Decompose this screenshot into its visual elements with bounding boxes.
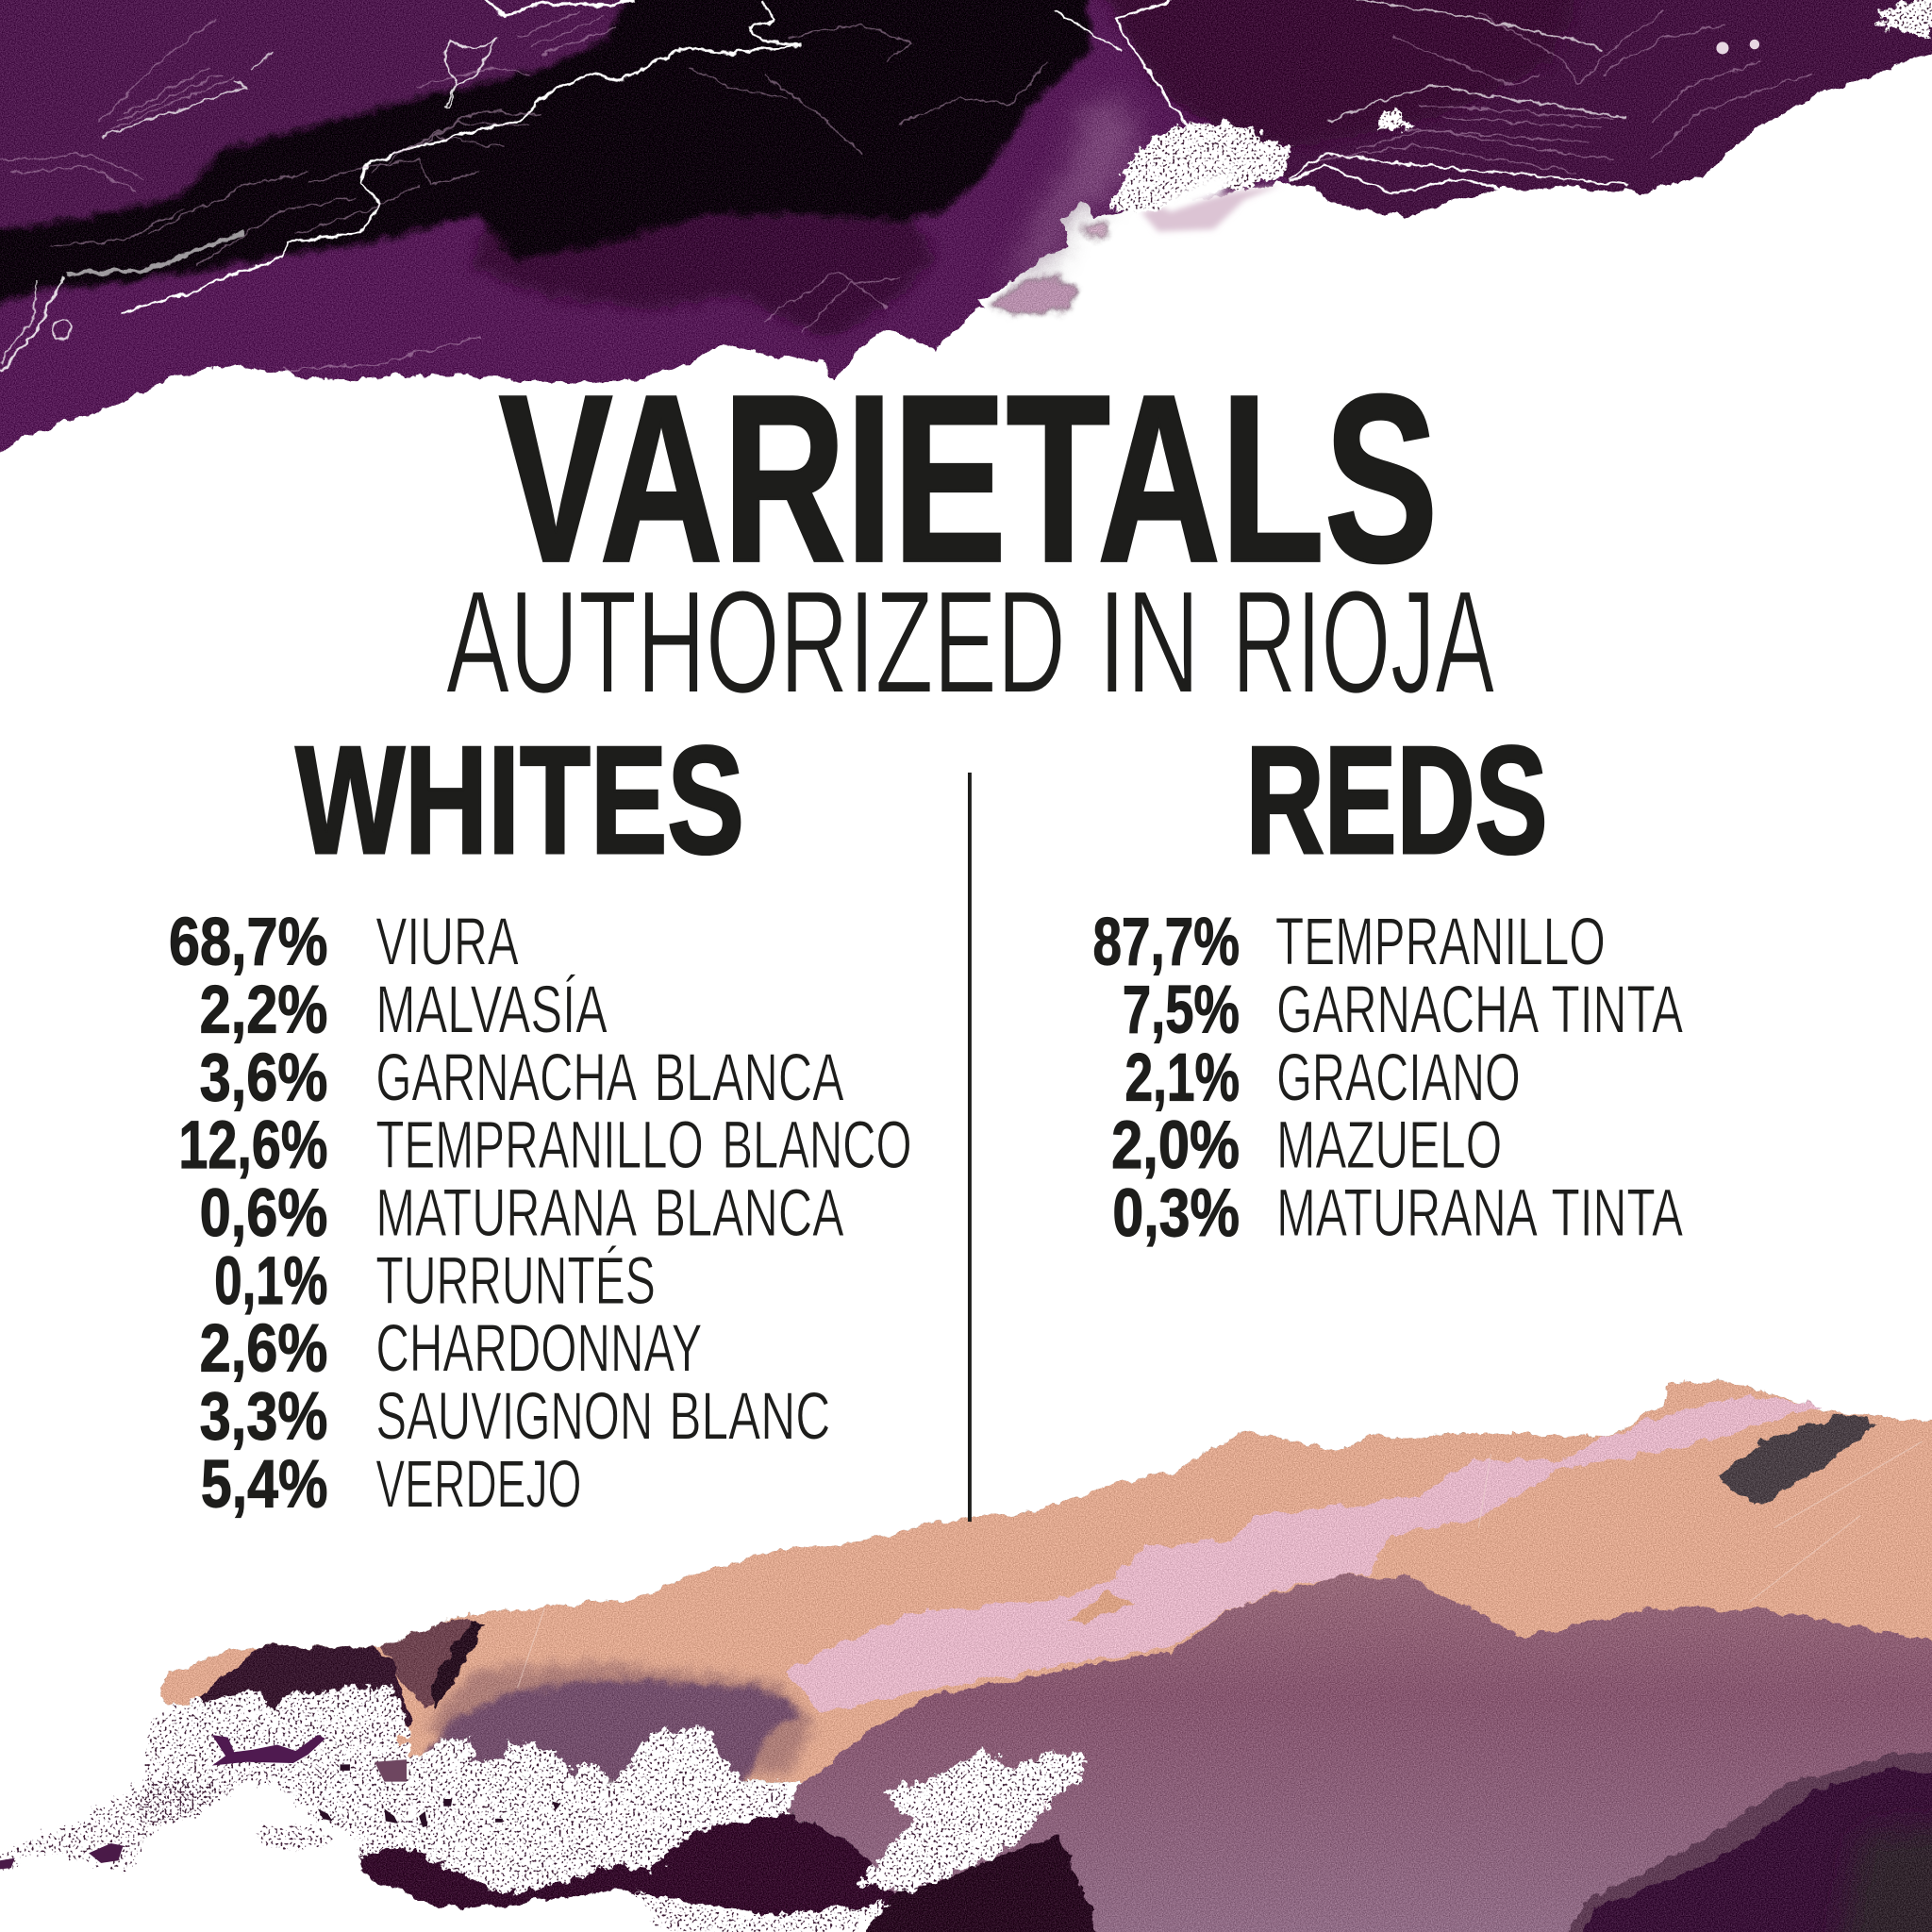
row: Verdejo: 5,4%	[201, 1446, 327, 1522]
faint contour lines	[0, 12, 1811, 370]
row: Chardonnay: CHARDONNAY	[375, 1311, 702, 1387]
tail dark marks	[0, 1843, 124, 1869]
row: Graciano: 2,1%	[1124, 1040, 1240, 1115]
row: Tempranillo: 87,7%	[1093, 905, 1240, 980]
row: Sauvignon Blanc: 3,3%	[200, 1379, 327, 1455]
row: Garnacha Tinta: GARNACHA	[1276, 973, 1539, 1048]
divider	[968, 773, 972, 1522]
sparse speckle small	[253, 1824, 333, 1852]
bright road lines	[0, 0, 1626, 371]
row: Maturana Tinta: MATURANA	[1276, 1175, 1538, 1251]
row: Maturana Tinta: TINTA	[1551, 1175, 1683, 1251]
sparse speckle tail	[0, 1774, 234, 1875]
row: Mazuelo: MAZUELO	[1276, 1108, 1502, 1183]
row: Garnacha Blanca	[200, 1040, 844, 1115]
crag streak	[382, 1619, 487, 1709]
dark crag	[192, 1647, 411, 1725]
row: Graciano: GRACIANO	[1276, 1040, 1521, 1115]
title	[446, 346, 1495, 724]
town solid core	[1158, 173, 1239, 212]
mountain layers	[160, 1380, 1932, 1932]
row: Tempranillo Blanco: 12,6%	[178, 1108, 327, 1183]
mauve hole	[375, 1759, 407, 1782]
row: Chardonnay: 2,6%	[200, 1311, 327, 1387]
peach patch	[1066, 1592, 1134, 1623]
row: Malvasia: 2,2%	[200, 973, 327, 1048]
terrain mass	[0, 0, 1932, 463]
row: Chardonnay	[200, 1311, 702, 1387]
heading: reds: REDS	[1245, 715, 1547, 886]
row: Maturana Blanca: BLANCA	[655, 1175, 844, 1251]
dark spots	[318, 1764, 560, 1827]
row: Mazuelo: 2,0%	[1111, 1108, 1240, 1183]
rosy transition	[425, 1663, 813, 1774]
small white speckle	[1377, 108, 1411, 133]
dark rock patch	[1719, 1414, 1879, 1507]
row: Malvasia: MALVASÍA	[375, 973, 608, 1048]
row: Maturana Blanca: MATURANA	[375, 1175, 637, 1251]
right ridge halo	[1541, 1750, 1932, 1932]
row: Tempranillo	[1093, 905, 1606, 980]
scratches	[518, 1441, 1923, 1688]
row: Mazuelo	[1111, 1108, 1502, 1183]
panel: reds	[1093, 715, 1683, 1251]
row: Turruntes: TURRUNTÉS	[375, 1243, 656, 1319]
heading: whites: WHITES	[295, 715, 744, 886]
top right speckle	[1875, 0, 1932, 37]
row: Turruntes: 0,1%	[214, 1243, 327, 1319]
panel: whites	[169, 715, 912, 1522]
row: Verdejo	[201, 1446, 581, 1522]
row: Tempranillo Blanco	[178, 1108, 912, 1183]
row: Garnacha Blanca: 3,6%	[200, 1040, 327, 1115]
pink band	[784, 1395, 1824, 1713]
subtitle: IN	[1098, 559, 1200, 724]
mauve mountain	[789, 1576, 1932, 1932]
row: Maturana Blanca: 0,6%	[200, 1175, 327, 1251]
dark peak	[844, 1836, 1115, 1932]
dark upper right	[1084, 0, 1590, 148]
base purple	[0, 0, 1932, 463]
right speckle field	[857, 1750, 1084, 1891]
row: Maturana Blanca	[200, 1175, 844, 1251]
row: Viura: 68,7%	[169, 905, 327, 980]
upper right plateau	[1109, 0, 1932, 217]
row: Verdejo: VERDEJO	[375, 1446, 581, 1522]
subtitle: AUTHORIZED	[446, 559, 1066, 724]
left mauve blend	[419, 1678, 801, 1789]
row: Garnacha Blanca: GARNACHA	[375, 1040, 637, 1115]
subtitle: RIOJA	[1232, 559, 1495, 724]
upper left plateau	[0, 0, 665, 233]
row: Viura	[169, 905, 519, 980]
streak core	[431, 1622, 487, 1710]
row: Sauvignon Blanc: SAUVIGNON	[375, 1379, 653, 1455]
row: Viura: VIURA	[375, 905, 519, 980]
panel: top purple terrain	[0, 0, 1932, 463]
row: Maturana Tinta	[1112, 1175, 1683, 1251]
pale haze	[1004, 98, 1140, 295]
pale town fade	[1141, 185, 1281, 232]
right dark ridge	[1571, 1768, 1932, 1932]
row: Graciano	[1124, 1040, 1521, 1115]
purple hole	[212, 1735, 325, 1766]
row: Garnacha Tinta: TINTA	[1551, 973, 1683, 1048]
panel: bottom mountain landscape	[0, 1380, 1932, 1932]
black valley	[0, 0, 1091, 321]
row: Garnacha Tinta	[1123, 973, 1683, 1048]
dark bottom ridge	[361, 1811, 893, 1915]
white town speckle	[1110, 124, 1292, 210]
row: Tempranillo: TEMPRANILLO	[1275, 905, 1606, 980]
lower dark wash	[468, 209, 937, 339]
right grey corner	[1836, 1824, 1932, 1932]
row: Tempranillo Blanco: TEMPRANILLO	[375, 1108, 704, 1183]
pale island 2	[1082, 222, 1109, 239]
white speckle field	[142, 1688, 791, 1895]
row: Maturana Tinta: 0,3%	[1112, 1175, 1240, 1251]
peach slope	[160, 1380, 1932, 1787]
row: Garnacha Blanca: BLANCA	[655, 1040, 844, 1115]
pale dots	[1716, 40, 1759, 54]
row: Tempranillo Blanco: BLANCO	[722, 1108, 912, 1183]
row: Sauvignon Blanc: BLANC	[669, 1379, 830, 1455]
row: Malvasia	[200, 973, 608, 1048]
row: Garnacha Tinta: 7,5%	[1123, 973, 1240, 1048]
bottom speckle strip	[635, 1891, 893, 1932]
pale island	[989, 276, 1078, 315]
row: Sauvignon Blanc	[200, 1379, 830, 1455]
title: Varietals: VARIETALS	[499, 346, 1438, 611]
row: Turruntes	[214, 1243, 656, 1319]
